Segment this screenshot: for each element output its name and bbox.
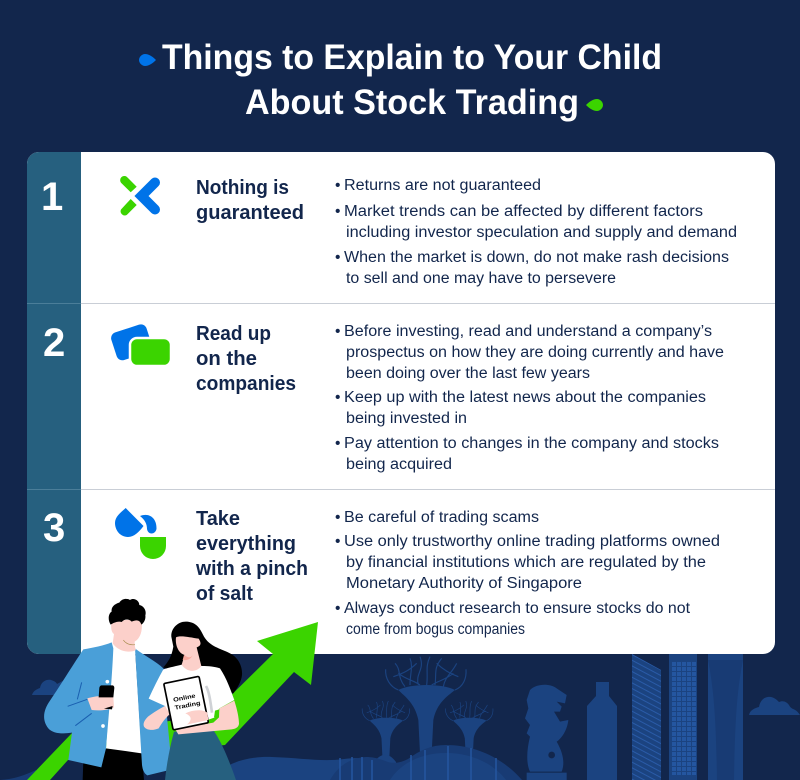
man t-shirt — [106, 645, 142, 753]
bullets 3: Be careful of trading scams — [344, 509, 539, 526]
bullets 2 — [335, 323, 724, 473]
icon: blue drop — [139, 54, 156, 66]
bullets 3: come from bogus companies — [346, 621, 525, 638]
panel: main card — [27, 152, 775, 654]
heading 2: companies — [196, 373, 296, 395]
bullets 3: Use only trustworthy online trading platforms owned — [344, 533, 720, 550]
heading 3: of salt — [196, 583, 253, 605]
bullets 2: being invested in — [346, 410, 467, 427]
icon: tablet: Trading — [174, 701, 201, 712]
bullets 1: • — [335, 249, 340, 266]
heading 3: with a pinch — [195, 558, 308, 580]
woman hair — [163, 622, 242, 693]
bullets 2: being acquired — [346, 456, 452, 473]
man jacket — [44, 642, 113, 767]
bullets 1: • — [335, 177, 340, 194]
woman right forearm — [175, 701, 239, 734]
woman face and neck — [176, 636, 201, 671]
building: twisted tower — [708, 654, 743, 780]
woman skirt — [165, 730, 236, 780]
illustration: couple — [44, 599, 242, 780]
bullets 1: Market trends can be affected by different factors — [344, 203, 703, 220]
heading 3: everything — [196, 533, 296, 555]
man trousers — [83, 748, 144, 780]
skyline background — [0, 654, 800, 780]
supertree: large — [386, 657, 466, 753]
woman hand — [185, 710, 208, 725]
man hand — [87, 696, 114, 710]
arrow glimpse under arm — [214, 709, 219, 717]
supertree: small left — [362, 701, 410, 758]
bullets 3: Always conduct research to ensure stocks do not — [344, 600, 691, 617]
icon: green drop — [586, 99, 603, 111]
bullets 2: Keep up with the latest news about the companies — [344, 389, 706, 406]
gardens domes and hills — [0, 745, 522, 780]
merlion statue — [525, 685, 568, 780]
heading 2 — [196, 323, 296, 395]
bullets 1: Returns are not guaranteed — [344, 177, 541, 194]
man hair — [109, 599, 146, 625]
bullets 3 — [335, 509, 720, 638]
title line 1: Things to Explain to Your Child — [162, 38, 662, 77]
bullets 1: including investor speculation and supply and demand — [346, 224, 737, 241]
bullets 3: • — [335, 509, 340, 526]
number 1: 1 — [41, 175, 63, 219]
woman — [144, 622, 242, 780]
panel: row 2 — [43, 321, 724, 473]
bullets 1: to sell and one may have to persevere — [346, 270, 616, 287]
bullets 2: Before investing, read and understand a company’s — [344, 323, 712, 340]
bullets 3: • — [335, 600, 340, 617]
arrow: green growth — [27, 622, 318, 780]
heading 1: Nothing is — [196, 177, 289, 199]
man head and neck — [111, 620, 142, 652]
supertree: small right — [446, 701, 493, 758]
bullets 2: • — [335, 389, 340, 406]
bullets 3: Monetary Authority of Singapore — [346, 575, 582, 592]
icon: pouring drop — [115, 508, 166, 559]
icon: left cloud — [32, 679, 67, 695]
icon: cards — [110, 323, 171, 366]
building: striped tower — [632, 654, 661, 780]
heading 1 — [196, 177, 304, 224]
bullets 1 — [335, 177, 737, 287]
title line 2: About Stock Trading — [245, 83, 579, 122]
heading 3: Take — [196, 508, 240, 530]
bullets 3: by financial institutions which are regulated by the — [346, 554, 706, 571]
bullets 2: been doing over the last few years — [346, 365, 590, 382]
bullets 2: • — [335, 323, 340, 340]
title — [139, 38, 662, 122]
bullets 3: • — [335, 533, 340, 550]
skyline sculpture group — [362, 657, 568, 780]
heading 2: on the — [196, 348, 257, 370]
woman left arm — [144, 706, 170, 730]
bullets 2: Pay attention to changes in the company and stocks — [344, 435, 719, 452]
number 2: 2 — [43, 321, 65, 365]
building: window tower — [669, 654, 697, 780]
bullets 1: • — [335, 203, 340, 220]
icon: right cloud — [749, 697, 800, 715]
heading 1: guaranteed — [196, 202, 304, 224]
bullets 1: When the market is down, do not make rash decisions — [344, 249, 729, 266]
heading 3 — [195, 508, 308, 605]
number 3: 3 — [43, 506, 65, 550]
panel: row 1 — [41, 175, 737, 287]
heading 2: Read up — [196, 323, 271, 345]
icon: tablet — [164, 676, 208, 730]
icon: cross arrow — [120, 176, 155, 215]
bullets 2: prospectus on how they are doing currently and have — [346, 344, 724, 361]
panel: row 3 — [43, 506, 720, 638]
man — [44, 599, 172, 780]
woman t-shirt — [149, 665, 234, 731]
icon: phone — [99, 685, 114, 709]
bullets 2: • — [335, 435, 340, 452]
building: bottle tower — [587, 682, 617, 780]
icon: tablet: Online — [173, 693, 197, 704]
